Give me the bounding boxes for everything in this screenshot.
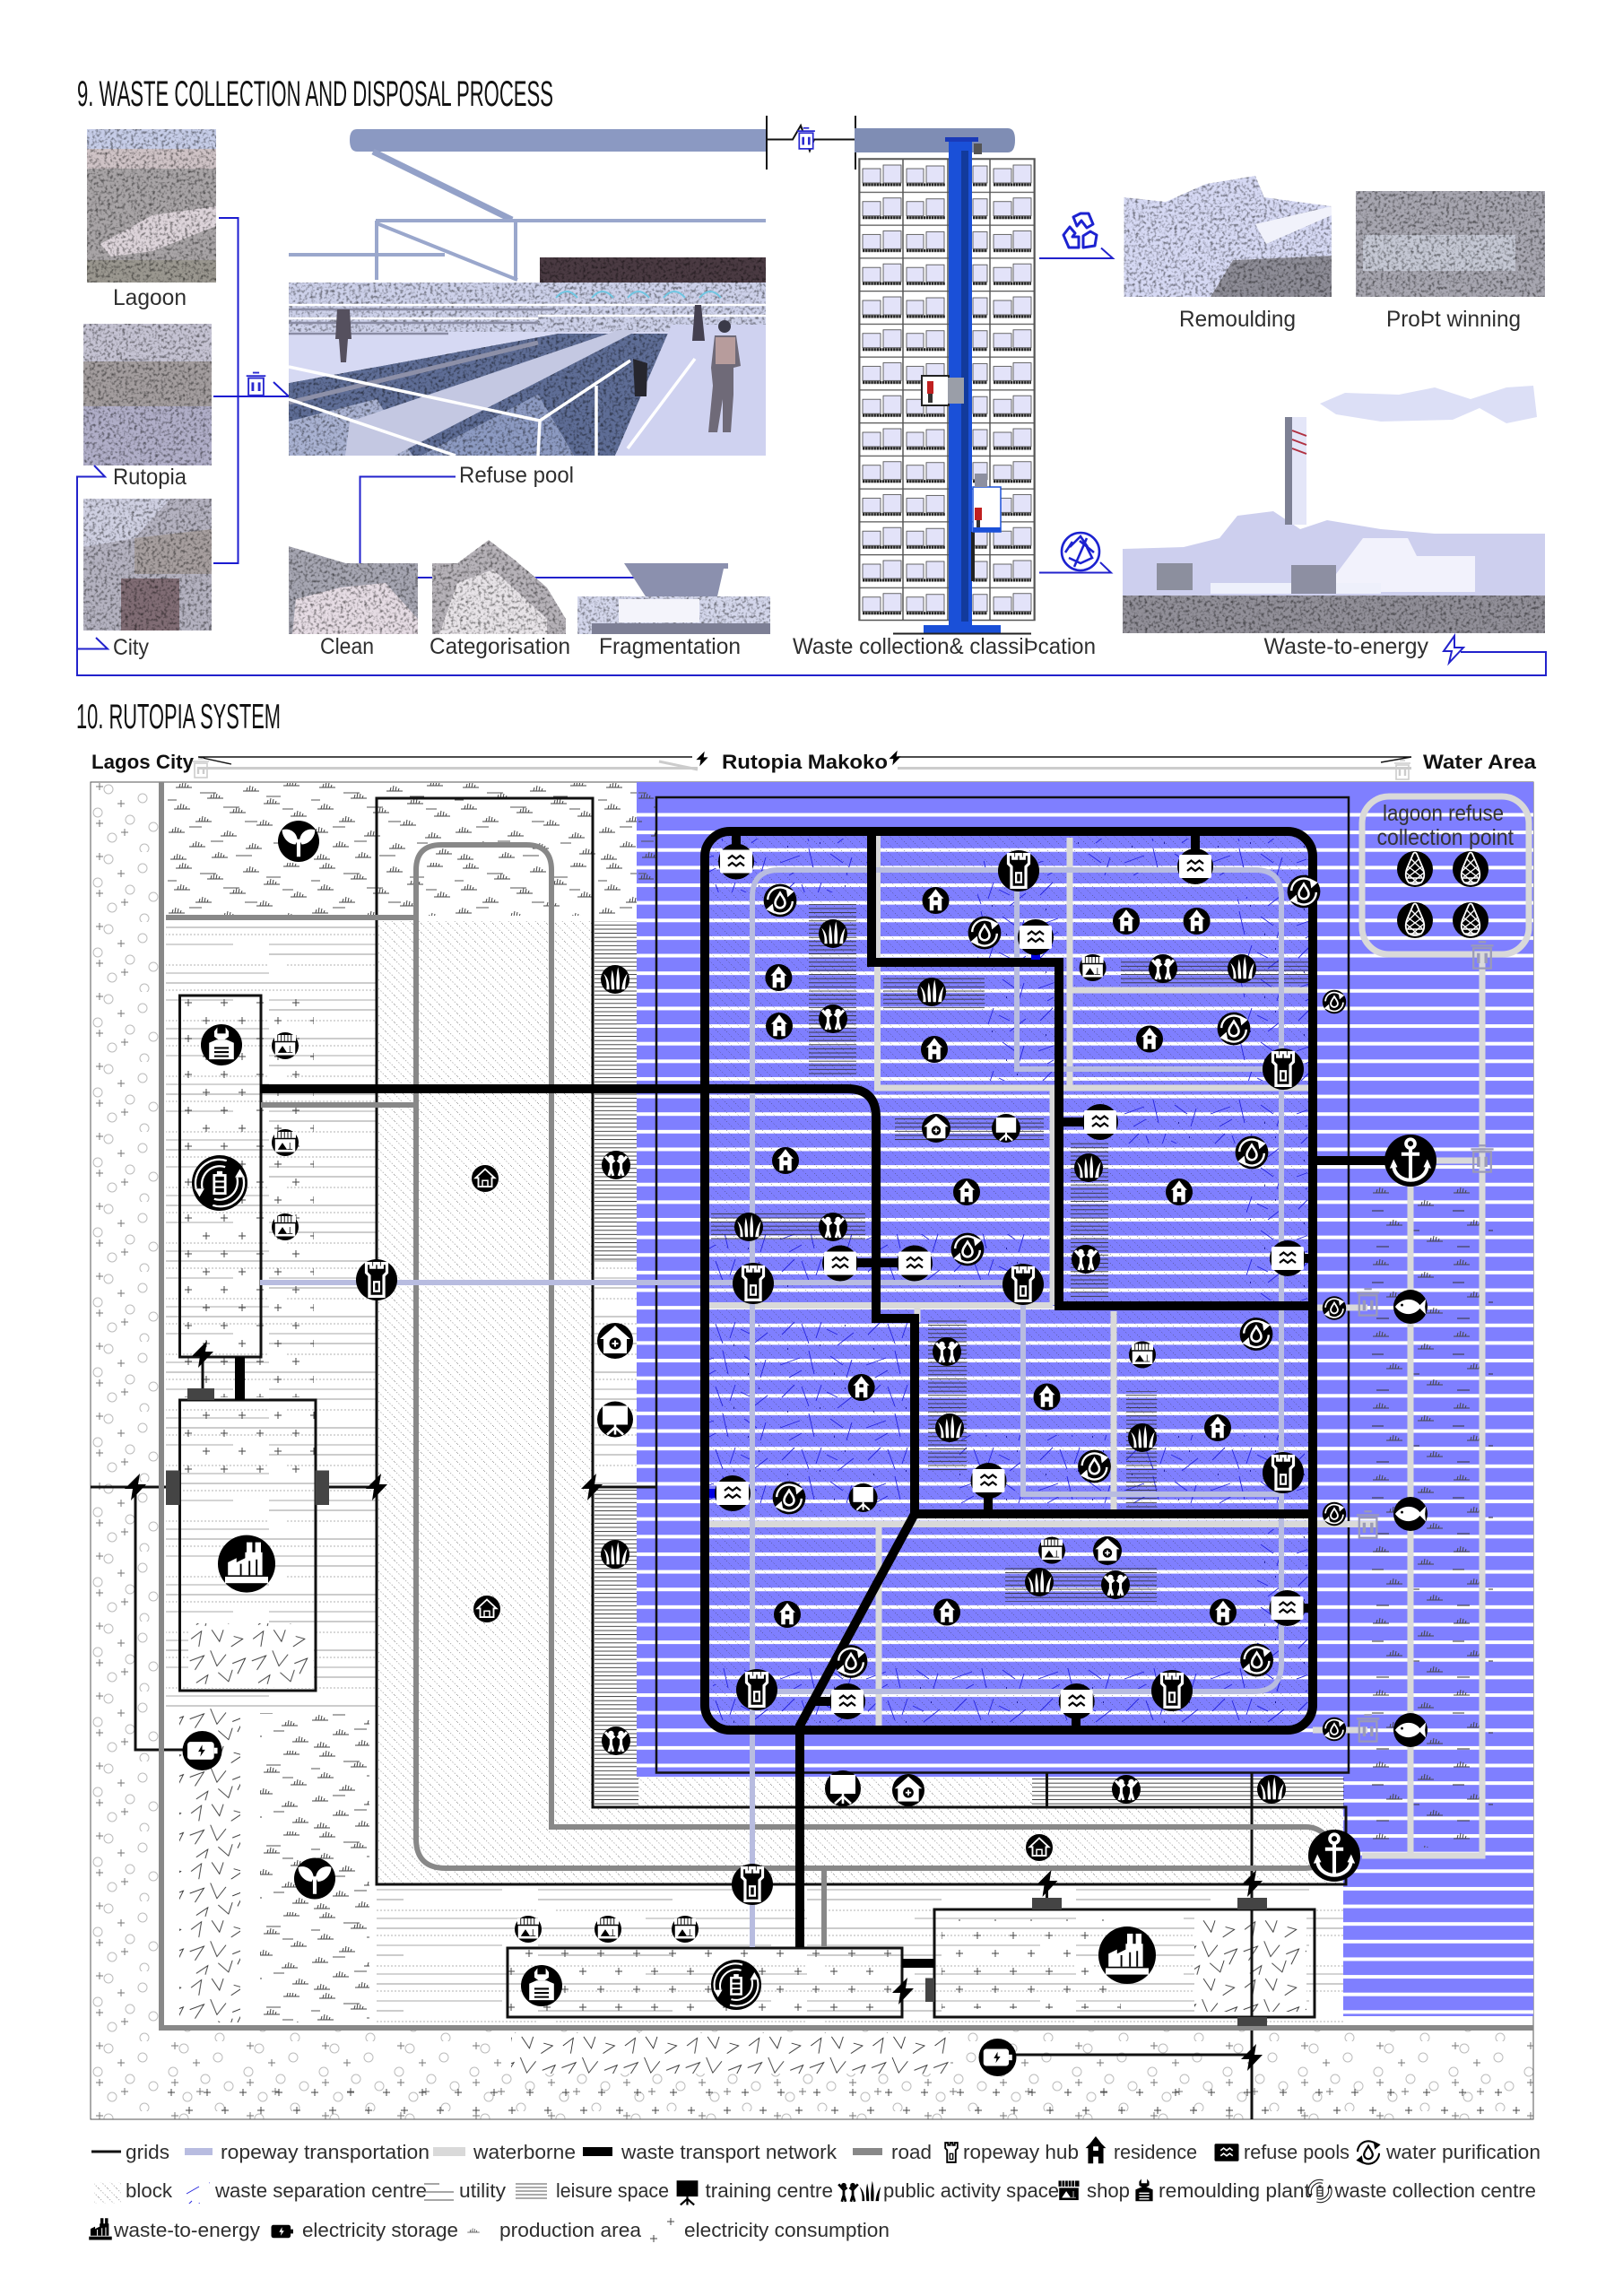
label: categorisation: Categorisation: [430, 634, 570, 659]
icon: anchor: [1308, 1830, 1360, 1882]
icon: public grass space: [1228, 954, 1256, 983]
heading: section 9: 9. WASTE COLLECTION AND DISPOSAL PROCESS: [77, 74, 553, 114]
icon: training centre: [825, 1770, 861, 1806]
label: profit winning: ProÞt winning: [1386, 307, 1521, 332]
icon: recycle: [1063, 213, 1097, 248]
icon: refuse pool: [822, 1245, 858, 1281]
ropeway routes: [260, 870, 1281, 1947]
icon: ropeway hub: [1151, 1670, 1193, 1711]
icon: public grass space: [917, 978, 946, 1006]
connector: beam break with trash icon: [767, 116, 855, 170]
icon: clinic: [892, 1774, 924, 1806]
label: city: City: [113, 635, 149, 660]
person: figure with helmet: [335, 309, 352, 362]
label: Rutopia Makoko: Rutopia Makoko: [722, 751, 888, 773]
label: lagoon refuse collection point: [1377, 801, 1514, 850]
icon: electricity bolt: [1241, 1870, 1263, 1897]
icon: refuse pool: [829, 1683, 865, 1719]
legend: utility: [424, 2179, 506, 2202]
icon: shop: [272, 1129, 299, 1156]
photo: waste-to-energy plant: [1123, 417, 1545, 633]
legend: residence: residence: [1114, 2141, 1197, 2163]
tower beam: [855, 128, 1015, 152]
icon: shop: [272, 1032, 299, 1059]
icon: ropeway hub: [733, 1263, 774, 1304]
building: remoulding left: [179, 996, 261, 1357]
icon: header trash right: [1394, 761, 1410, 779]
zone: utility area bottom: [377, 1884, 1343, 2025]
icon: water purification small: [1323, 1718, 1346, 1741]
legend: waste-to-energy: waste-to-energy: [113, 2219, 260, 2241]
label: waste collection and classification: Waste collection& classiÞcation: [793, 634, 1096, 659]
building: bottom waste-to-energy: [934, 1909, 1315, 2017]
icon: fish: [1393, 1713, 1428, 1747]
photo: profit winning: [1356, 191, 1545, 297]
zone: grass over water: [638, 783, 656, 900]
legend: utility: utility: [459, 2179, 506, 2202]
label: lagoon refuse collection point: lagoon refuse: [1383, 801, 1504, 826]
legend: public activity space: public activity space: [883, 2179, 1059, 2202]
label: rutopia: Rutopia: [113, 465, 187, 490]
icon: residence: [1113, 908, 1140, 935]
zone: top production area: [166, 783, 650, 916]
plan: Rutopia system: [91, 782, 1533, 2119]
legend: waste separation centre: waste separation centre: [214, 2179, 427, 2202]
legend: production area: production area: [499, 2219, 642, 2241]
collection mast: [893, 137, 1031, 634]
legend: grids: [91, 2141, 169, 2163]
header section lines: [198, 757, 1411, 770]
photo: rutopia: [83, 324, 212, 465]
icon: sprout: [294, 1858, 335, 1900]
zone: city bubble base: [91, 782, 1533, 2119]
icon: clinic: [1093, 1536, 1122, 1565]
icon: header bolt right: [889, 751, 901, 765]
icon: training centre: [597, 1401, 633, 1437]
flow line: refuse pool to fragmentation: [360, 477, 645, 578]
icon: grey trash: [1357, 1715, 1379, 1742]
zone: inner ground: [164, 783, 1532, 2026]
icon: grey trash: [1357, 1511, 1379, 1538]
icon: grey trash: [1471, 1145, 1494, 1172]
label: Lagos City: Lagos City: [91, 751, 195, 773]
icon: public activity: [602, 1151, 630, 1179]
icon: header bolt left: [696, 752, 708, 766]
icon: refuse pool: [1270, 1240, 1306, 1276]
icon: public grass space: [734, 1213, 763, 1241]
flow line: to waste-to-energy: [1039, 562, 1111, 572]
icon: water purification: [951, 1233, 984, 1265]
smoke cloud: [1320, 386, 1537, 423]
icon: residence: [953, 1178, 980, 1205]
grid outlines: [91, 797, 1349, 2119]
icon: waste-to-energy: [218, 1535, 275, 1593]
building: bottom remoulding: [508, 1948, 902, 2017]
heading: section 10: 10. RUTOPIA SYSTEM: [76, 698, 281, 736]
icon: refuse pool: [970, 1463, 1006, 1499]
icon: clinic: [922, 1114, 950, 1143]
legend: waste collection centre: waste collection centre: [1333, 2179, 1536, 2202]
flow lines: sources to refuse pool: [213, 218, 289, 563]
icon: remoulding plant: [201, 1024, 242, 1065]
icon: refuse pool: [715, 1475, 751, 1511]
icon: residence: [1136, 1026, 1163, 1053]
icon: shop: [1129, 1342, 1156, 1369]
icon: grey trash: [1357, 1289, 1379, 1316]
legend: ropeway transportation: ropeway transportation: [221, 2141, 430, 2163]
icon: water purification: [1240, 1644, 1273, 1676]
icon: public grass space: [1025, 1568, 1054, 1596]
legend: road: [853, 2141, 932, 2163]
zone: leisure strip below water: [1032, 1778, 1344, 1806]
icon: refuse pool: [1059, 1683, 1095, 1719]
icon: shop: [272, 1213, 299, 1240]
icon: electricity bolt: [192, 1341, 213, 1368]
icon: public grass space: [1128, 1423, 1157, 1452]
legend: road: road: [891, 2141, 932, 2163]
icon: electricity bolt: [1241, 2044, 1263, 2071]
legend: electricity consumption: electricity consumption: [684, 2219, 890, 2241]
icon: public grass space: [1074, 1153, 1103, 1182]
icon: net bag: [1453, 902, 1488, 938]
icon: refuse pool: [1177, 848, 1213, 884]
icon: water purification: [1240, 1318, 1272, 1351]
flow line: to remoulding: [1039, 248, 1113, 258]
icon: electricity bolt: [125, 1474, 146, 1500]
zone: water production tufts: [1367, 1184, 1493, 1848]
icon: shop: [595, 1916, 621, 1943]
legend: shop: [1058, 2179, 1130, 2202]
icon: net bag: [1397, 851, 1433, 887]
icon: residence: [1204, 1414, 1231, 1441]
waste transport network: [240, 831, 1410, 1963]
waterborne routes: [709, 796, 1529, 1856]
icon: public activity: [1072, 1245, 1100, 1274]
icon: ropeway hub: [998, 850, 1039, 891]
icon: residence: [772, 1147, 799, 1174]
overhead beams: [289, 129, 767, 280]
icon: sprout: [278, 821, 319, 862]
icon: ropeway hub: [736, 1669, 777, 1710]
icon: public grass space: [819, 919, 847, 948]
photo: lagoon: [87, 129, 216, 283]
icon: public activity: [602, 1726, 630, 1755]
icon: net bag: [1397, 902, 1433, 938]
icon: shop: [1038, 1537, 1065, 1564]
icon: grey trash: [1471, 942, 1494, 969]
photo: clean: [289, 546, 418, 634]
icon: refuse pool: [1082, 1104, 1118, 1140]
icon: public activity: [933, 1337, 961, 1366]
photo: fragmentation: [577, 563, 770, 634]
icon: electricity bolt: [366, 1474, 387, 1500]
icon: public activity: [819, 1213, 847, 1241]
icon: waste collection centre: [192, 1155, 247, 1211]
icon: recycling globe: [1062, 533, 1099, 570]
icon: net bag: [1453, 851, 1488, 887]
icon: training centre: [992, 1114, 1020, 1143]
legend: [89, 2136, 1541, 2242]
icon: training centre: [849, 1483, 878, 1512]
legend: waterborne: [433, 2141, 576, 2163]
legend: waste transport network: waste transport network: [621, 2141, 838, 2163]
icon: water purification: [764, 884, 796, 917]
person: foreground figure: [708, 320, 741, 432]
legend: water purification: water purification: [1385, 2141, 1541, 2163]
legend: refuse pools: refuse pools: [1244, 2141, 1350, 2163]
icon: electricity storage: [183, 1731, 222, 1770]
legend: training centre: training centre: [705, 2179, 833, 2202]
zone: waste separation centres: [709, 839, 1309, 1724]
storage rack tower: [859, 159, 1035, 621]
label: lagoon: Lagoon: [113, 285, 187, 310]
icon: water purification small: [1323, 1296, 1346, 1320]
icon: public activity: [1112, 1775, 1141, 1804]
icon: electricity bolt: [581, 1474, 603, 1500]
person: rear figure: [692, 305, 705, 341]
zone: shards bottom: [511, 2032, 950, 2074]
building: waste-to-energy left: [179, 1400, 316, 1691]
label: fragmentation: Fragmentation: [599, 634, 741, 659]
legend: electricity storage: electricity storage: [302, 2219, 458, 2241]
person: worker at pool: [633, 359, 647, 396]
icon: public grass space: [601, 1540, 629, 1569]
icon: residence: [1210, 1598, 1237, 1625]
icon: house block: [473, 1596, 500, 1622]
icon: electricity storage: [979, 2039, 1017, 2076]
icon: refuse pool: [718, 843, 754, 879]
icon: electricity bolt: [892, 1978, 914, 2005]
zone: leisure strip lower: [595, 1486, 638, 1807]
icon: public activity: [1101, 1570, 1130, 1599]
legend: block: [94, 2179, 173, 2204]
icon: residence: [774, 1601, 801, 1628]
legend: ropeway hub: ropeway hub: [963, 2141, 1079, 2163]
icon: house block: [1026, 1834, 1053, 1861]
legend: waterborne: waterborne: [473, 2141, 576, 2163]
icon: house block: [472, 1165, 499, 1192]
icon: ropeway hub: [732, 1864, 773, 1905]
zone: electricity consumption marks: [179, 994, 314, 1397]
icon: residence: [1033, 1383, 1060, 1410]
zone: leisure strip upper: [595, 921, 638, 1260]
icon: header trash left: [193, 759, 209, 778]
icon: water purification small: [1323, 1502, 1346, 1526]
icon: remoulding plant: [521, 1965, 562, 2006]
icon: waste collection centre: [711, 1960, 761, 2010]
icon: water purification small: [1323, 990, 1346, 1013]
blue junction marks: [709, 954, 1040, 1498]
icon: energy bolt: [1444, 636, 1463, 663]
legend: grids: grids: [126, 2141, 169, 2163]
zone: hatch strip below water: [638, 1778, 1032, 1807]
icon: residence: [933, 1598, 960, 1625]
photo: refuse pool: [289, 257, 766, 456]
zone: utility area left: [166, 922, 377, 1709]
grid connection tabs: [166, 1388, 1267, 2026]
icon: water purification: [1218, 1013, 1250, 1045]
icon: water purification: [773, 1482, 805, 1514]
label: Water Area: Water Area: [1423, 751, 1537, 773]
icon: water purification: [835, 1645, 867, 1678]
icon: ropeway hub: [1263, 1452, 1304, 1493]
icon: fish: [1393, 1290, 1428, 1324]
zone: grass left: [260, 1713, 369, 2022]
label: lagoon refuse collection point: collection point: [1377, 825, 1514, 850]
icon: residence: [848, 1374, 875, 1401]
zone: water top band: [637, 782, 1533, 809]
icon: shop: [672, 1916, 699, 1943]
icon: residence: [765, 964, 792, 991]
zone: leisure in settlement: [711, 904, 1308, 1602]
icon: refuse pool: [1270, 1590, 1306, 1626]
icon: ropeway hub: [1002, 1264, 1044, 1305]
zone: shard strip left: [179, 1709, 240, 2022]
label: clean: Clean: [320, 634, 374, 659]
icon: residence: [1184, 908, 1211, 935]
label: waste-to-energy: Waste-to-energy: [1264, 634, 1428, 659]
icon: shop: [1080, 954, 1107, 981]
zone: water: [637, 782, 1533, 2016]
icon: water purification: [1078, 1450, 1111, 1483]
icon: anchor: [1384, 1135, 1436, 1187]
icon: ropeway hub: [1263, 1048, 1304, 1090]
road frame: [161, 782, 1533, 2028]
icon: public activity: [819, 1004, 847, 1033]
legend: block: block: [126, 2179, 173, 2202]
label: remoulding: Remoulding: [1179, 307, 1296, 332]
icon: residence: [1166, 1178, 1193, 1205]
photo: categorisation: [432, 540, 566, 634]
zone: hatch in settlement: [705, 831, 1313, 1730]
icon: waste-to-energy: [1098, 1926, 1156, 1984]
zone: bottom plus rows: [161, 2083, 1533, 2119]
photo: remoulding: [1124, 176, 1332, 297]
icon: residence: [922, 887, 949, 914]
icon: fish: [1393, 1497, 1428, 1531]
icon: electricity bolt: [1037, 1870, 1058, 1897]
zone: block hatch: [377, 921, 1346, 1884]
flow lines: return loop: [77, 465, 1546, 675]
icon: water purification: [1288, 875, 1320, 908]
legend: residence: [1086, 2136, 1197, 2163]
icon: refuse pool: [1018, 919, 1054, 955]
icon: public grass space: [935, 1413, 964, 1442]
zone: utility strip: [595, 1260, 638, 1486]
icon: ropeway hub: [356, 1259, 397, 1300]
icon: trash bin flow: [247, 373, 265, 396]
icon: water purification: [1236, 1136, 1268, 1169]
icon: public grass space: [1257, 1775, 1286, 1804]
icon: public activity: [1149, 954, 1177, 983]
icon: residence: [921, 1036, 948, 1063]
icon: water purification: [968, 917, 1001, 949]
icon: refuse pool: [897, 1245, 933, 1281]
icon: clinic: [597, 1323, 633, 1359]
lift cabin upper: [922, 376, 964, 405]
legend: shop: shop: [1087, 2179, 1130, 2202]
roads: [166, 845, 1327, 1947]
photo: city: [83, 499, 212, 631]
legend: leisure space: leisure space: [556, 2179, 669, 2202]
icon: shop: [515, 1916, 542, 1943]
icon: public grass space: [601, 965, 629, 994]
label: refuse pool: Refuse pool: [459, 463, 574, 488]
icon: residence: [766, 1013, 793, 1039]
lift cabin lower: [973, 474, 1001, 532]
legend: remoulding plant: remoulding plant: [1159, 2179, 1310, 2202]
